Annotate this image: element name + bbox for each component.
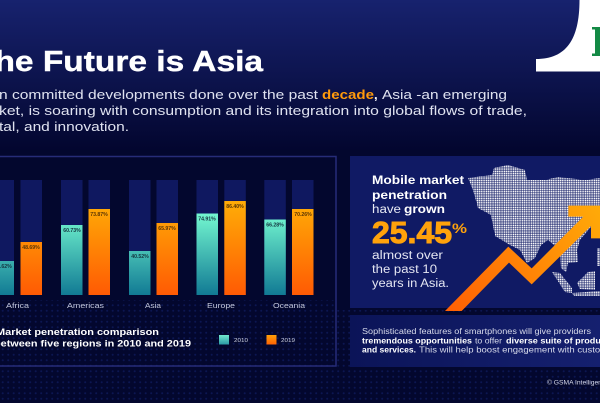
bar group: Americas: 73.87% <box>90 212 108 218</box>
bar group: Africa: 48.69% <box>22 245 40 251</box>
bar group: Asia: 65.97% <box>158 226 176 232</box>
panel text: have <box>372 204 401 216</box>
bar group: Asia <box>129 180 178 310</box>
panel: smartphone features callout <box>350 315 600 367</box>
bar group: Americas <box>61 180 110 310</box>
bar group: Asia: Asia <box>145 301 162 310</box>
panel text: years in Asia. <box>372 278 449 290</box>
icon: rising arrow <box>445 206 600 311</box>
panel text: grown <box>404 204 445 216</box>
bar group: Africa <box>0 180 42 310</box>
panel text: the past 10 <box>372 264 437 276</box>
intro paragraph: Asia -an emerging <box>382 87 507 102</box>
panel text: penetration <box>372 190 447 202</box>
bar group: Americas: Americas <box>67 301 104 310</box>
logo tab <box>536 0 600 72</box>
panel: smartphone features callout: to offer <box>475 336 502 346</box>
intro paragraph <box>0 87 527 134</box>
bar group: Oceania: 66.28% <box>266 222 284 228</box>
panel: mobile market penetration <box>350 156 600 311</box>
panel: bar chart comparison <box>0 150 336 366</box>
intro paragraph: tal, and innovation. <box>0 119 129 134</box>
intro paragraph: decade <box>322 87 374 102</box>
intro paragraph: ket, is soaring with consumption and its integration into global flows of trade, <box>0 103 527 118</box>
intro paragraph: n committed developments done over the past <box>0 87 318 102</box>
bar group: Americas: 60.73% <box>63 228 81 234</box>
bar group: Oceania: Oceania <box>273 301 306 310</box>
panel: smartphone features callout: This will help boost engagement with customers. <box>419 346 600 354</box>
panel: smartphone features callout: Sophisticated features of smartphones will give providers <box>362 327 591 336</box>
bar group: Europe: Europe <box>207 301 235 310</box>
legend <box>219 335 295 344</box>
panel: smartphone features callout: and services. <box>362 346 416 354</box>
legend: 2010 <box>234 338 248 344</box>
panel: smartphone features callout: tremendous opportunities <box>362 336 473 346</box>
panel text: Mobile market <box>372 175 464 187</box>
dotted map of Asia <box>468 165 600 296</box>
bar group: Africa: Africa <box>6 301 30 310</box>
panel text: % <box>452 220 468 236</box>
bar group: Asia: 40.52% <box>131 254 149 260</box>
panel: smartphone features callout: diverse suite of products <box>506 336 600 346</box>
panel text: 25.45 <box>372 215 452 250</box>
bar group: Europe <box>196 180 246 310</box>
bar group: Europe: 74.91% <box>198 216 216 222</box>
header gradient band <box>0 0 600 150</box>
chart caption <box>0 327 191 348</box>
bar group: Oceania <box>264 180 314 310</box>
legend: 2019 <box>281 338 295 344</box>
chart caption: Market penetration comparison <box>0 327 159 337</box>
panel text <box>372 175 468 290</box>
panel text: almost over <box>372 250 443 262</box>
bar group: Oceania: 70.26% <box>294 212 312 218</box>
intro paragraph: , <box>374 87 378 102</box>
bar group: Europe: 86.40% <box>226 204 244 210</box>
